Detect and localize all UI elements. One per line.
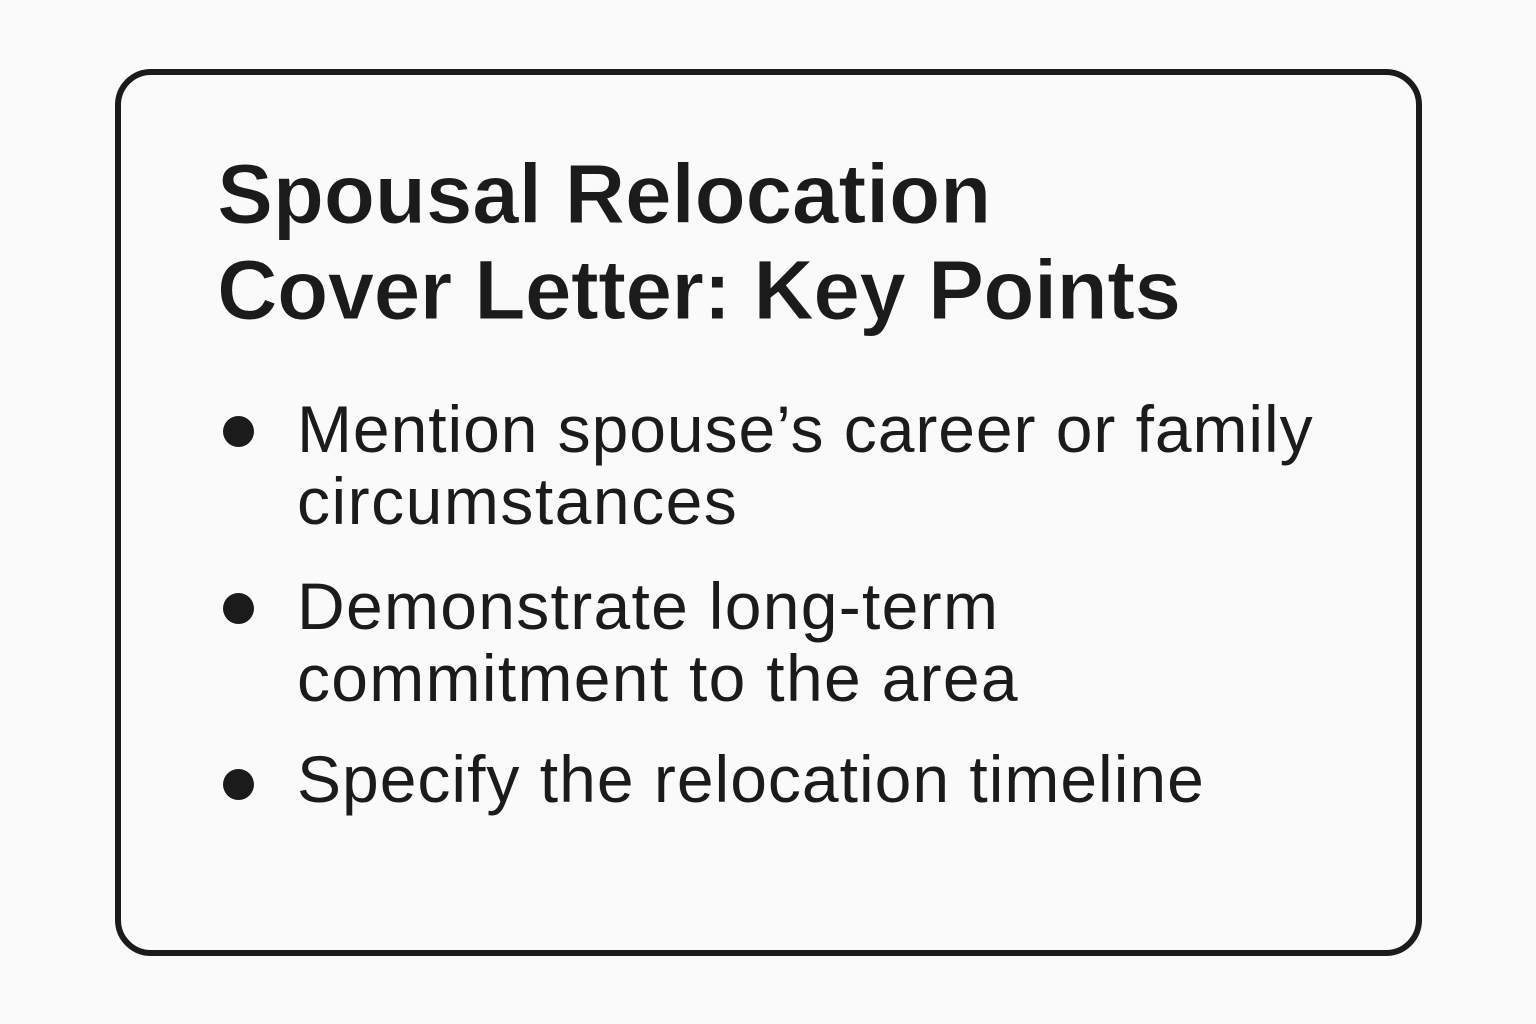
panel: key points card bbox=[115, 69, 1422, 956]
title: Spousal Relocation bbox=[217, 147, 991, 241]
bullet 1 icon bbox=[223, 416, 254, 447]
bullet 1 text: Mention spouse’s career or family bbox=[297, 392, 1314, 466]
bullet 2 icon bbox=[223, 593, 254, 624]
bullet 2 text: commitment to the area bbox=[297, 641, 1019, 715]
bullet 1 text: circumstances bbox=[297, 464, 738, 538]
bullet 2 text: Demonstrate long-term bbox=[297, 569, 999, 643]
bullet 2 text bbox=[297, 569, 1019, 715]
title: Cover Letter: Key Points bbox=[217, 243, 1180, 337]
bullet 3 text: Specify the relocation timeline bbox=[297, 742, 1205, 816]
bullet 3 icon bbox=[223, 769, 254, 800]
title bbox=[217, 147, 1180, 337]
bullet 1 text bbox=[297, 392, 1314, 538]
